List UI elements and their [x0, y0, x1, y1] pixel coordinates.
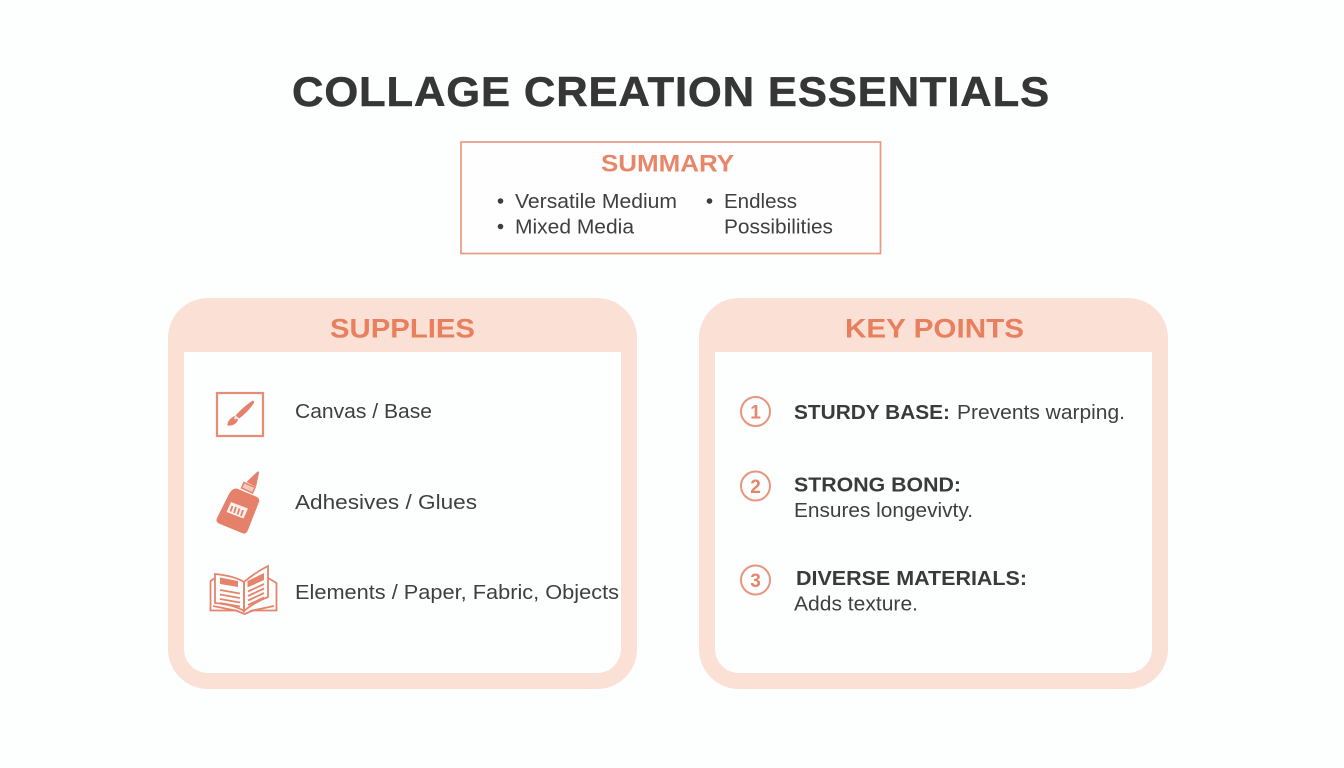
- key point 3: DIVERSE MATERIALS:: [796, 567, 1027, 590]
- key point 3: [741, 566, 1027, 616]
- supply label: elements: Elements / Paper, Fabric, Objects: [295, 581, 619, 604]
- summary list: [498, 190, 833, 238]
- key point 2: [741, 472, 973, 522]
- icon: open book: [210, 566, 276, 614]
- supply label: adhesives: Adhesives / Glues: [295, 491, 477, 514]
- key point 1: [741, 397, 1125, 426]
- title: COLLAGE CREATION ESSENTIALS: [292, 68, 1050, 115]
- key point 2: Ensures longevivty.: [794, 499, 973, 522]
- key point 3: 3: [750, 571, 761, 592]
- summary heading: SUMMARY: [601, 150, 734, 178]
- key point 2: 2: [750, 477, 761, 498]
- key point 3: Adds texture.: [794, 592, 918, 616]
- icon: glue bottle: [216, 471, 259, 534]
- summary list: Mixed Media: [515, 216, 635, 238]
- summary list: Endless: [724, 190, 797, 213]
- summary list: Versatile Medium: [515, 190, 677, 213]
- summary list: Possibilities: [724, 216, 833, 238]
- key point 1: STURDY BASE:: [794, 401, 950, 424]
- key point 2: STRONG BOND:: [794, 474, 961, 496]
- key point 1: Prevents warping.: [957, 401, 1125, 424]
- panel: key points: [699, 298, 1168, 689]
- supply label: canvas: Canvas / Base: [295, 400, 432, 423]
- panel: summary: [461, 142, 880, 254]
- key point 1: 1: [750, 402, 761, 424]
- supplies heading: SUPPLIES: [330, 314, 475, 344]
- key points heading: KEY POINTS: [845, 314, 1024, 344]
- panel: supplies: [168, 298, 637, 689]
- icon: paintbrush on canvas: [217, 393, 263, 436]
